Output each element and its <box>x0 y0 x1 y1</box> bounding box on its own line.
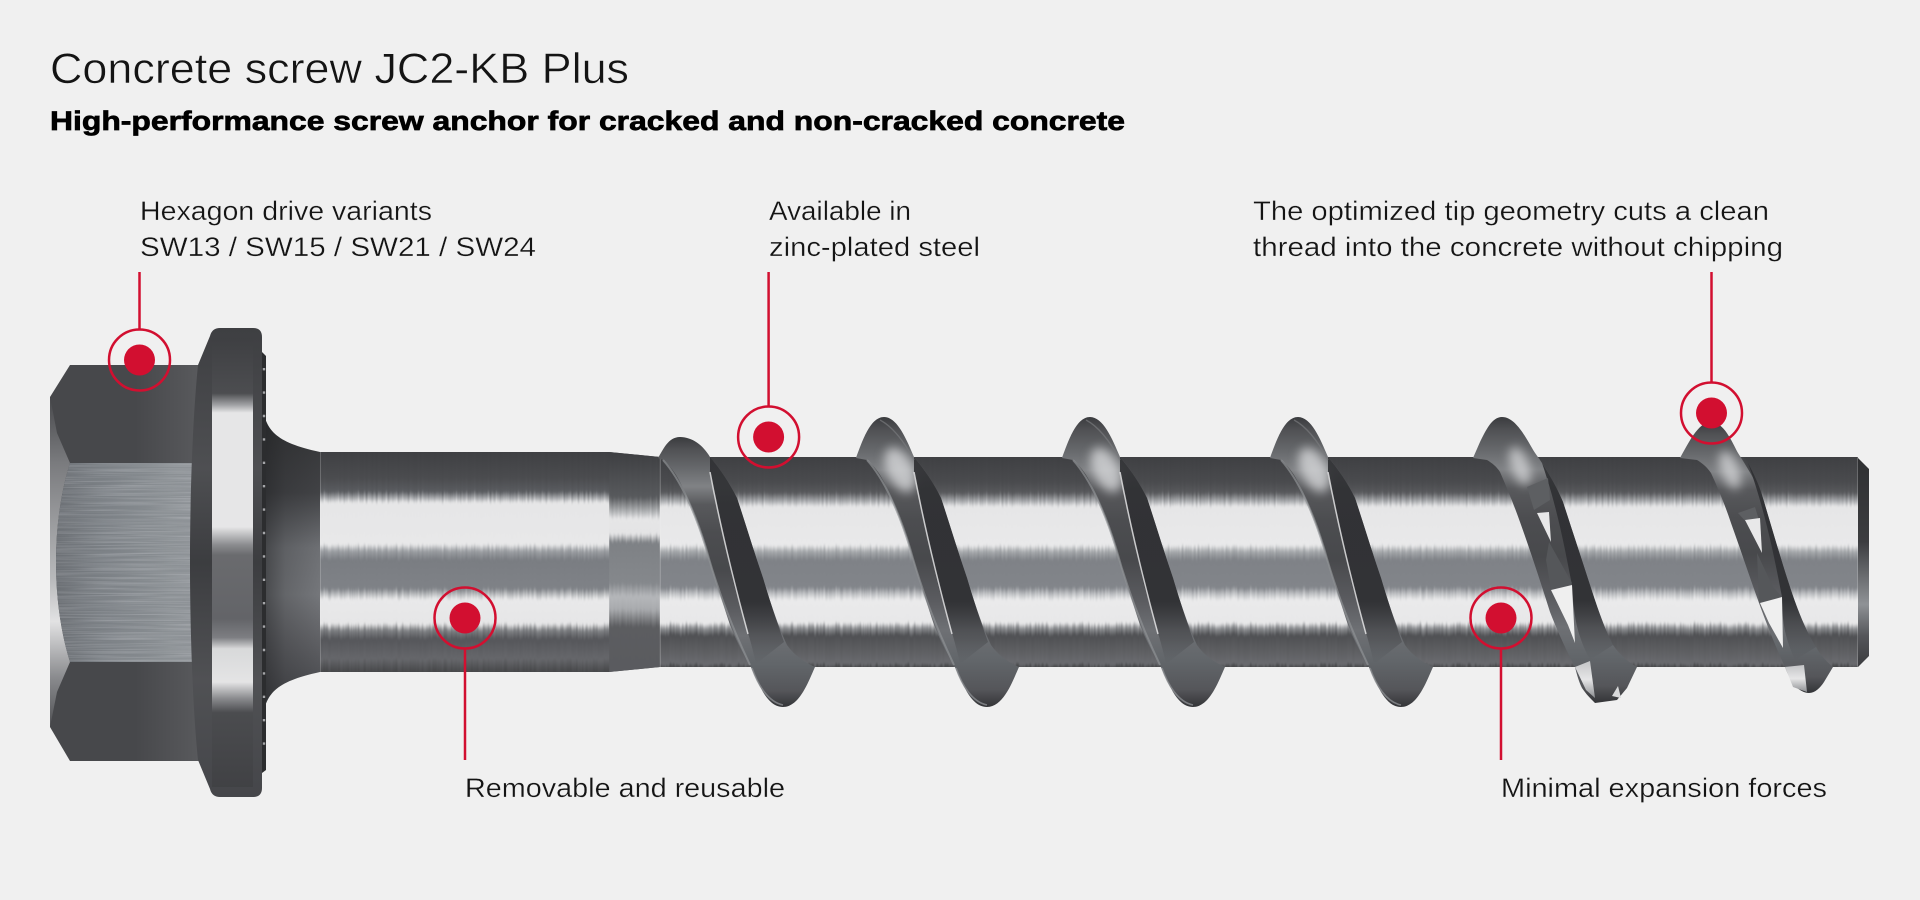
thread 5 with cutting notches <box>1473 417 1637 703</box>
callout text: tip geometry: The optimized tip geometry cuts a clean <box>1253 196 1769 226</box>
smooth shank <box>320 440 660 684</box>
callout text: material: Available in <box>769 196 911 226</box>
callout text: expansion forces: Minimal expansion forces <box>1501 773 1827 803</box>
marker <box>738 406 799 468</box>
callout: removable and reusable <box>434 588 785 803</box>
callout: optimized tip geometry <box>1253 196 1783 444</box>
shaft end chamfer <box>1858 458 1869 667</box>
flange <box>190 328 266 797</box>
callout: minimal expansion forces <box>1470 588 1827 803</box>
threaded shaft <box>660 457 1858 667</box>
callout text: tip geometry: thread into the concrete without chipping <box>1253 232 1783 262</box>
callout text: removable: Removable and reusable <box>465 773 785 803</box>
marker <box>109 330 170 390</box>
leader line <box>767 272 770 406</box>
thread 4 <box>1270 417 1433 707</box>
title: Concrete screw JC2-KB Plus <box>50 45 629 93</box>
callout text: hexagon drive: Hexagon drive variants <box>140 196 432 226</box>
screw illustration <box>50 328 1869 797</box>
transition section <box>609 445 660 680</box>
thread 2 <box>856 417 1019 707</box>
shank neck <box>262 405 320 720</box>
hexagon head <box>50 365 205 761</box>
leader line <box>464 649 466 760</box>
marker <box>1470 588 1532 648</box>
marker <box>434 588 496 648</box>
callout: hexagon drive variants <box>109 196 536 390</box>
marker <box>1681 382 1742 444</box>
thread 1 <box>658 437 815 707</box>
leader line <box>1710 272 1713 382</box>
callout: zinc-plated steel <box>738 196 980 468</box>
leader line <box>1500 649 1502 760</box>
leader line <box>138 272 141 329</box>
callout text: material: zinc-plated steel <box>769 232 980 262</box>
thread 3 <box>1062 417 1225 707</box>
thread 6 with cutting notches <box>1680 422 1833 693</box>
subtitle: High-performance screw anchor for cracked and non-cracked concrete <box>50 106 1125 136</box>
callout text: hexagon drive: SW13 / SW15 / SW21 / SW24 <box>140 232 536 262</box>
